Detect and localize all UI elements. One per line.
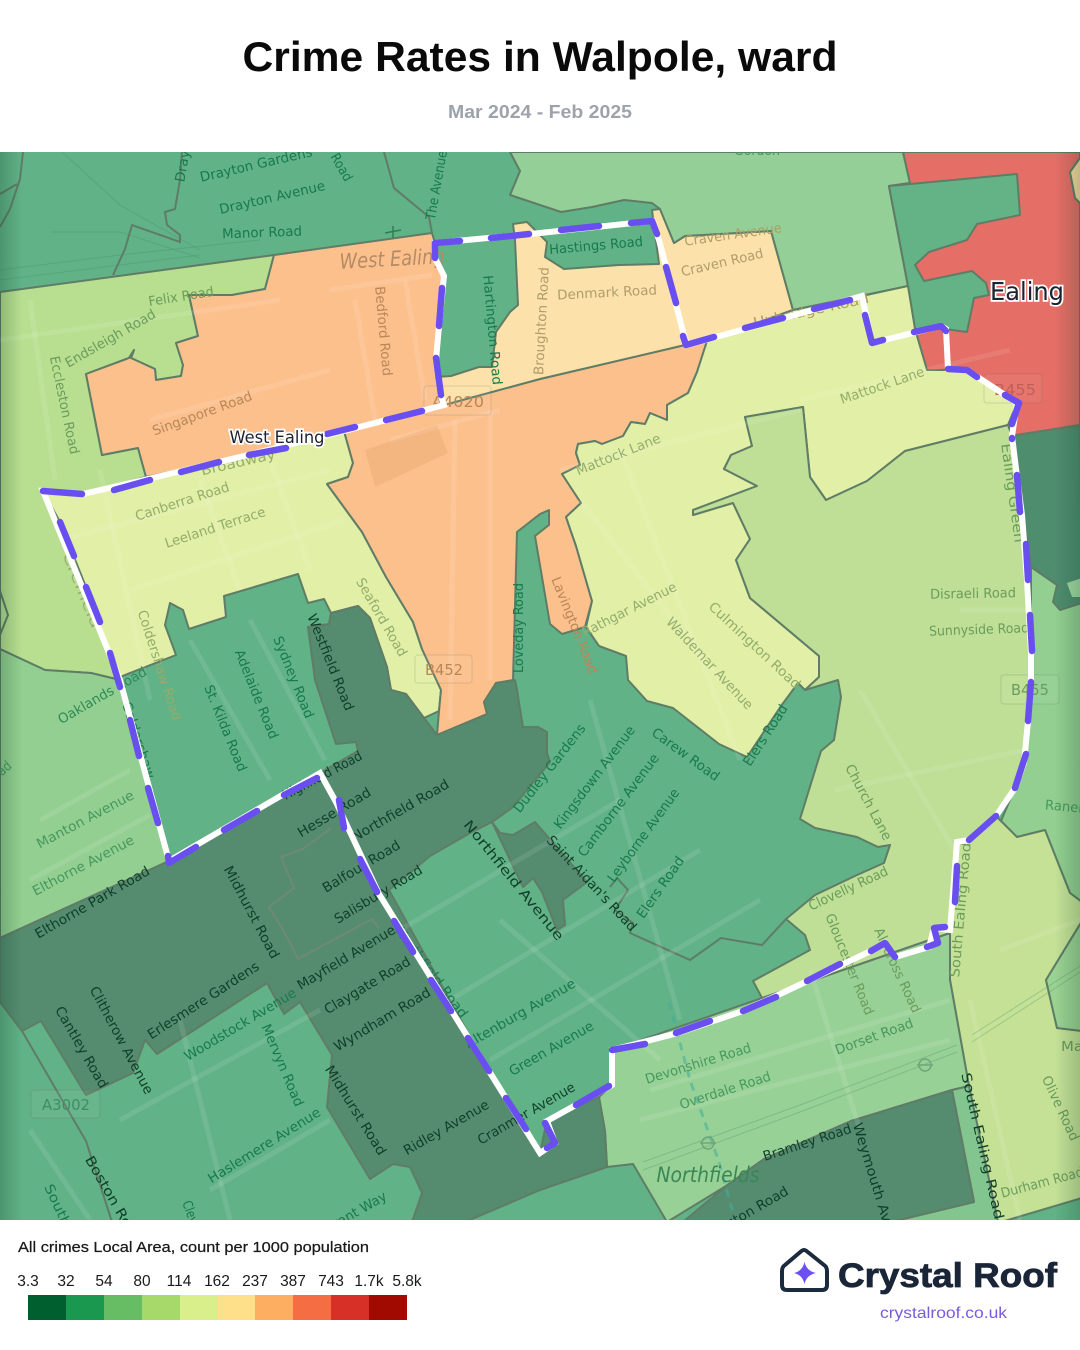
area: Mattock Lane yellow	[562, 286, 1017, 757]
street labels: Northfield Avenue	[460, 817, 567, 944]
legend scale numbers: 32	[57, 1273, 75, 1290]
street labels: Manton Avenue	[34, 787, 137, 852]
street labels: B455	[994, 381, 1036, 399]
street labels: St. Kilda Road	[200, 683, 250, 774]
street labels: Loveday Road	[511, 583, 527, 673]
shield: A3002	[31, 1090, 100, 1118]
district label: Northfields: Northfields	[656, 1163, 760, 1187]
shield: B455 north	[984, 374, 1042, 403]
area: green block in red	[889, 174, 1020, 332]
area: top right corner pale	[1070, 155, 1080, 205]
street labels: Denmark Road	[557, 282, 657, 304]
street labels: Claygate Road	[321, 954, 414, 1018]
street labels: Broughton Road	[531, 267, 553, 375]
area: Bottom strip south of Weymouth	[904, 1086, 998, 1220]
legend scale numbers: 114	[167, 1273, 192, 1290]
street labels: Dudley Gardens	[510, 721, 589, 816]
street labels: Manor Road	[222, 224, 302, 242]
street labels: Ealing Green	[997, 443, 1027, 544]
area: Northfield dark	[0, 606, 607, 1222]
crime rate area polygons	[0, 152, 1080, 1222]
street labels: Broadway	[199, 447, 277, 479]
street labels: Westfield Road	[303, 612, 357, 713]
area: upper left lime	[0, 255, 274, 680]
area: Canberra yellow	[43, 431, 441, 718]
area: far east light	[1046, 921, 1080, 1031]
icon: house with star	[782, 1250, 827, 1290]
street labels: Dorset Road	[833, 1015, 916, 1058]
street labels: Clovelly Road	[806, 863, 891, 914]
street labels: Elthorne Park Road	[32, 863, 153, 942]
street labels: Midhurst Road	[220, 863, 282, 962]
street labels: Altenburg Avenue	[462, 976, 579, 1052]
street labels: Elers Road	[634, 853, 688, 922]
vignette edges	[0, 152, 18, 1220]
faint streets	[0, 275, 1080, 1220]
street labels: Erlesmere Gardens	[145, 959, 262, 1043]
street labels: Devonshire Road	[643, 1040, 753, 1088]
street labels: Hastings Road	[549, 234, 644, 258]
street labels: Northfield Road	[392, 924, 471, 1021]
building patch	[365, 425, 448, 487]
street labels: Haslemere Avenue	[205, 1105, 324, 1187]
legend scale numbers: 54	[95, 1273, 113, 1290]
area: east dark green	[1012, 425, 1080, 610]
inner boundaries	[0, 152, 786, 1222]
street labels: Waldemar Avenue	[662, 614, 756, 713]
street labels: Cleve	[178, 1199, 204, 1232]
subtitle: date range: Mar 2024 - Feb 2025	[448, 102, 632, 122]
street labels: Salisbury Road	[332, 862, 425, 927]
icon: station symbols	[385, 226, 933, 1149]
legend scale numbers: 5.8k	[392, 1273, 422, 1290]
street labels: B452	[425, 661, 463, 679]
street labels: Wyndham Road	[331, 985, 434, 1055]
legend scale numbers: 743	[318, 1273, 344, 1290]
legend scale numbers: 162	[204, 1273, 230, 1290]
title: Crime Rates in Walpole, ward	[242, 33, 838, 80]
street labels: Ridley Avenue	[401, 1097, 492, 1159]
street labels: Northfield Road	[349, 776, 452, 845]
street labels: Mattock Lane	[574, 431, 663, 479]
street labels: Camborne Avenue	[575, 751, 663, 860]
street labels: Highfield Road	[280, 748, 365, 804]
street labels: Singapore Road	[150, 388, 254, 439]
street labels: South Ealing Road	[947, 842, 975, 978]
street labels: Carew Road	[648, 725, 722, 785]
street labels: Clitherow Avenue	[86, 984, 156, 1097]
area: Saint Aidan's dark patch	[492, 822, 587, 930]
street labels: Felix Road	[147, 284, 215, 310]
street labels: Church Lane	[841, 762, 895, 843]
street labels: Mayfield Avenue	[294, 922, 399, 994]
area: Weymouth dark	[683, 1090, 974, 1222]
street labels: Road	[327, 151, 356, 184]
street labels: Leyborne Avenue	[604, 786, 683, 886]
logo url: crystalroof.co.uk	[880, 1305, 1008, 1322]
street labels: Midhurst Road	[321, 1063, 389, 1158]
street labels: Alacross Road	[870, 925, 924, 1015]
area: small pale block	[1067, 578, 1080, 597]
street labels: Elers Road	[740, 702, 792, 769]
street labels: Craven Road	[680, 246, 765, 280]
street labels: Sunnyside Road	[929, 620, 1029, 640]
shield: B455 south	[1001, 675, 1059, 704]
street labels: Disraeli Road	[930, 585, 1016, 603]
street labels: Woodstock Avenue	[182, 985, 299, 1065]
street labels: Green Avenue	[506, 1018, 597, 1080]
street labels: Weymouth Avenue	[849, 1121, 905, 1260]
area: Devonshire light green	[599, 933, 969, 1222]
street labels: Boston Road	[81, 1153, 145, 1248]
street labels: Creffield	[59, 550, 103, 630]
legend scale numbers: 387	[280, 1273, 306, 1290]
legend	[17, 1239, 422, 1320]
railway lines	[0, 150, 1080, 1220]
street labels: Culmington Road	[705, 599, 804, 693]
street labels: Grant Way	[321, 1188, 390, 1237]
area: Denmark pale orange	[436, 209, 793, 405]
street labels: Oaklands Road	[55, 664, 150, 728]
area: Walpole Park pale green	[693, 407, 1031, 998]
street labels: Adelaide Road	[231, 647, 281, 741]
street labels: Cantley Road	[51, 1004, 111, 1091]
street labels: Hesse Road	[295, 785, 374, 841]
street labels: Weston Road	[706, 1183, 791, 1242]
legend scale numbers: 1.7k	[354, 1273, 384, 1290]
road number shields	[31, 374, 1059, 1118]
street labels: Dray	[172, 149, 194, 183]
shield: B452	[415, 655, 472, 683]
area: South Ealing pale	[950, 816, 1080, 1222]
street labels: Saint Aidan's Road	[543, 833, 640, 935]
street labels: A4020	[432, 393, 484, 411]
area: central orange	[327, 341, 707, 735]
street labels: Kingsdown Avenue	[551, 723, 639, 832]
place label: Ealing: Ealing	[990, 277, 1064, 306]
street labels: Canberra Road	[133, 479, 231, 525]
area: West Ealing north orange	[86, 233, 444, 477]
street labels: Bedford Road	[371, 286, 395, 377]
street labels: A3002	[42, 1096, 90, 1114]
place label: West Ealing: West Ealing	[230, 428, 324, 448]
street labels: Cranmer Avenue	[475, 1079, 578, 1148]
street labels: Gordon	[734, 143, 780, 159]
legend scale numbers: 3.3	[17, 1273, 39, 1290]
street labels: Gloucester Road	[821, 911, 877, 1017]
ward boundary: white line	[43, 221, 1031, 1153]
street labels: Lavington Road	[547, 575, 601, 676]
street labels: Elthorne Avenue	[30, 832, 137, 899]
area: lower left light green	[0, 649, 169, 938]
street labels: Rathgar Avenue	[579, 579, 679, 641]
street labels: Endsleigh Road	[62, 306, 159, 371]
street labels: Balfour Road	[320, 837, 403, 896]
area: east light green	[1001, 567, 1080, 902]
legend scale numbers: 80	[133, 1273, 151, 1290]
street labels: The Avenue	[423, 149, 451, 222]
legend colour bar	[28, 1295, 407, 1320]
street labels: Mattock Lane	[838, 364, 927, 408]
street labels: South	[40, 1182, 74, 1229]
area: top right light green	[510, 152, 910, 310]
legend scale numbers	[17, 1273, 422, 1290]
street labels: Coldershaw Road	[134, 608, 184, 722]
street labels: Bramley Road	[761, 1121, 854, 1165]
street labels: Uxbridge Road	[752, 291, 871, 331]
shield: A4020	[424, 386, 491, 415]
street labels: Drayton Avenue	[218, 178, 327, 218]
street labels: Craven Avenue	[684, 220, 783, 250]
street labels: B455	[1011, 681, 1049, 699]
street labels: South Ealing Road	[957, 1071, 1007, 1221]
area: Ealing red	[889, 152, 1080, 436]
legend title: All crimes Local Area, count per 1000 population	[18, 1239, 369, 1256]
street labels: Sydney Road	[269, 634, 317, 721]
street labels: Seaford Road	[352, 575, 410, 660]
district label: West Ealing: West Ealing	[339, 244, 445, 274]
logo: Crystal Roof	[782, 1250, 1058, 1322]
street labels: Leeland Terrace	[163, 504, 268, 552]
logo wordmark: Crystal Roof	[838, 1257, 1058, 1295]
street labels: Drayton Gardens	[198, 144, 314, 186]
street labels: Overdale Road	[678, 1069, 773, 1113]
legend scale numbers: 237	[242, 1273, 268, 1290]
street labels: Mervyn Road	[258, 1022, 307, 1109]
street labels: Coldershaw	[118, 700, 158, 781]
street labels: Eccleston Road	[46, 355, 82, 456]
street labels: Hartington Road	[479, 275, 505, 386]
ward boundary: purple dashes	[43, 221, 1032, 1148]
